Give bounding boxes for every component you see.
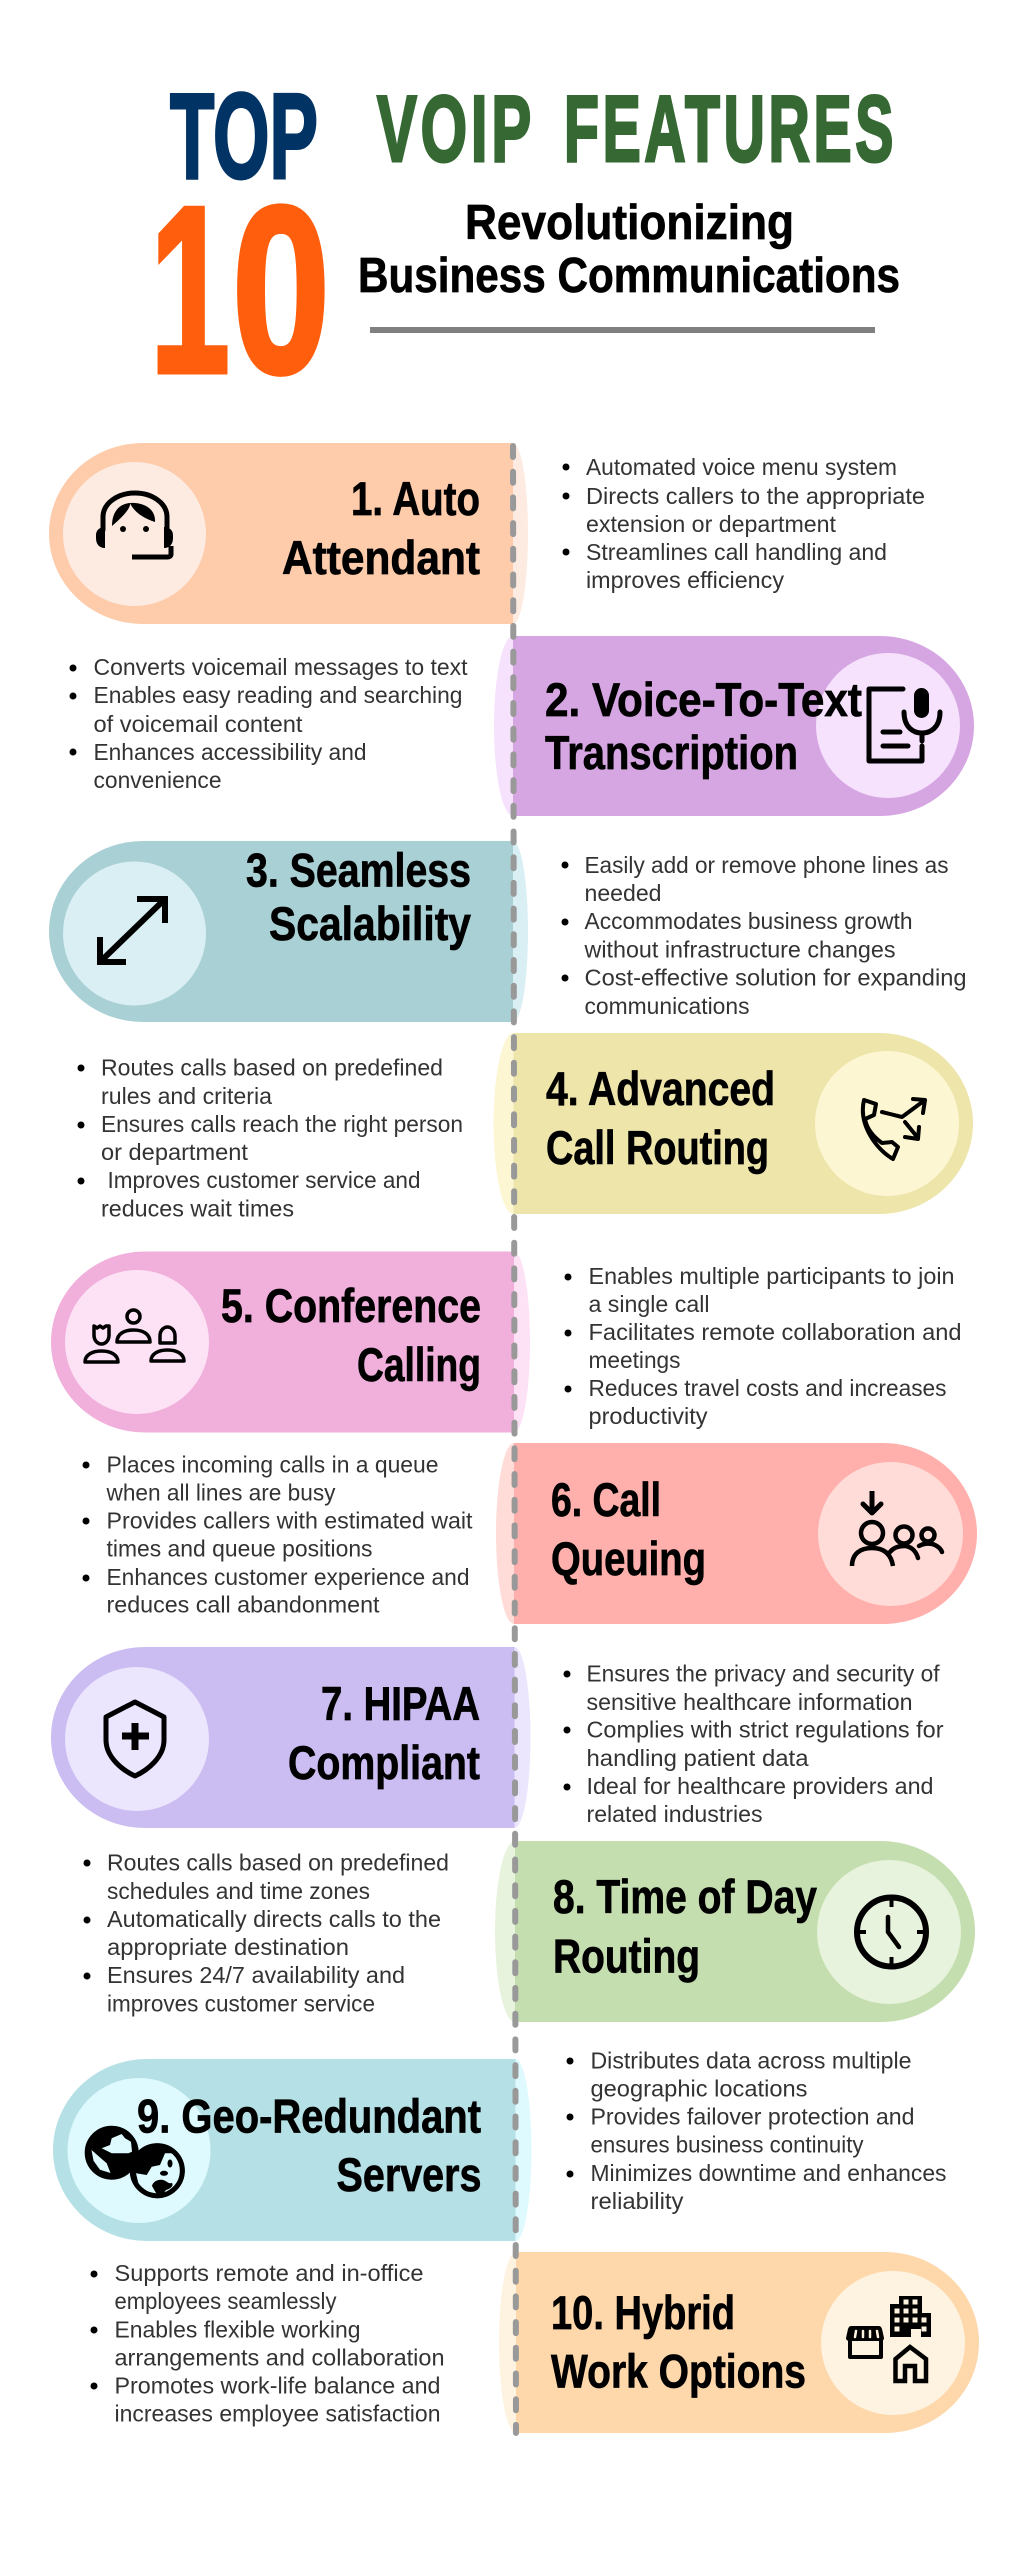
bullet list: without infrastructure changes bbox=[583, 936, 896, 962]
title: 10: 1 bbox=[150, 158, 230, 423]
heading bbox=[221, 1279, 481, 1391]
bullet list: sensitive healthcare information bbox=[586, 1689, 912, 1715]
heading: 5. Conference bbox=[221, 1279, 481, 1332]
bullet list: Routes calls based on predefined bbox=[107, 1850, 449, 1876]
bullet list: appropriate destination bbox=[107, 1934, 349, 1960]
bullet list: improves efficiency bbox=[586, 567, 785, 593]
bullet list: Easily add or remove phone lines as bbox=[584, 852, 948, 878]
bullet list: meetings bbox=[588, 1347, 680, 1373]
bullet list: reliability bbox=[590, 2188, 684, 2214]
heading: Routing bbox=[553, 1930, 700, 1982]
bullet list: employees seamlessly bbox=[114, 2288, 337, 2314]
bullet list: or department bbox=[101, 1139, 249, 1165]
bullet list: related industries bbox=[586, 1801, 762, 1827]
icon: headset agent bbox=[96, 493, 173, 557]
bullet list bbox=[70, 654, 468, 793]
bullet list: Enables flexible working bbox=[114, 2316, 360, 2342]
bullet list bbox=[78, 1054, 463, 1222]
heading: 1. Auto bbox=[351, 472, 480, 525]
bullet list: Cost-effective solution for expanding bbox=[584, 964, 966, 990]
title: TOP: TOP bbox=[170, 68, 318, 204]
subtitle line 2: Business Communications bbox=[358, 249, 900, 303]
bullet list: reduces call abandonment bbox=[106, 1592, 380, 1618]
bullet list: Enables multiple participants to join bbox=[588, 1263, 954, 1289]
bullet list: Provides callers with estimated wait bbox=[106, 1508, 473, 1534]
bullet list: handling patient data bbox=[586, 1745, 809, 1771]
panel: 7 HIPAA Compliant bbox=[51, 1647, 944, 1828]
heading bbox=[288, 1677, 480, 1789]
bullet list: Complies with strict regulations for bbox=[586, 1716, 944, 1742]
bullet list: Streamlines call handling and bbox=[586, 539, 887, 565]
icon: shield with plus bbox=[106, 1702, 164, 1776]
panel: 10 Hybrid Work Options bbox=[90, 2252, 979, 2433]
bullet list bbox=[562, 852, 966, 1019]
bullet list: Distributes data across multiple bbox=[590, 2048, 912, 2074]
bullet list: Ensures 24/7 availability and bbox=[107, 1962, 405, 1988]
heading: 8. Time of Day bbox=[553, 1870, 817, 1923]
panel: 8 Time of Day Routing bbox=[84, 1841, 975, 2022]
bullet list: Promotes work-life balance and bbox=[114, 2372, 440, 2398]
bullet list: communications bbox=[584, 993, 750, 1019]
title underline bbox=[370, 327, 875, 333]
title: 10 second digit: 0 bbox=[232, 158, 330, 423]
icon: document with microphone bbox=[869, 688, 940, 761]
bullet list: convenience bbox=[94, 767, 222, 793]
heading: Compliant bbox=[288, 1736, 480, 1789]
bullet list: Directs callers to the appropriate bbox=[586, 483, 925, 509]
bullet list: ensures business continuity bbox=[590, 2132, 864, 2158]
panel: 4 Advanced Call Routing bbox=[78, 1033, 973, 1222]
heading: Attendant bbox=[282, 531, 480, 584]
bullet list bbox=[564, 1263, 962, 1429]
panel: 1 Auto Attendant bbox=[49, 443, 925, 624]
bullet list bbox=[90, 2260, 444, 2426]
bullet list: Ensures calls reach the right person bbox=[101, 1111, 463, 1137]
bullet list: increases employee satisfaction bbox=[114, 2400, 440, 2426]
heading bbox=[553, 1870, 817, 1982]
heading bbox=[551, 1473, 706, 1585]
bullet list: Automated voice menu system bbox=[586, 454, 897, 480]
bullet list: Provides failover protection and bbox=[590, 2104, 914, 2130]
subtitle line 1: Revolutionizing bbox=[465, 196, 794, 250]
bullet list: a single call bbox=[588, 1291, 710, 1317]
heading: 7. HIPAA bbox=[321, 1677, 480, 1730]
heading bbox=[282, 472, 480, 584]
bullet list: Ideal for healthcare providers and bbox=[586, 1773, 934, 1799]
heading: Transcription bbox=[545, 726, 798, 779]
bullet list: Minimizes downtime and enhances bbox=[590, 2160, 946, 2186]
bullet list: Automatically directs calls to the bbox=[107, 1906, 441, 1932]
title: VOIP: VOIP bbox=[377, 76, 535, 181]
bullet list: Routes calls based on predefined bbox=[101, 1054, 443, 1080]
bullet list bbox=[564, 1660, 944, 1827]
bullet list: Ensures the privacy and security of bbox=[586, 1660, 940, 1686]
heading: Work Options bbox=[551, 2344, 806, 2398]
bullet list: reduces wait times bbox=[101, 1196, 294, 1222]
heading: 9. Geo-Redundant bbox=[137, 2090, 481, 2142]
bullet list bbox=[82, 1452, 473, 1618]
bullet list bbox=[566, 2048, 946, 2214]
bullet list bbox=[84, 1850, 449, 2016]
panel: 2 Voice-To-Text Transcription bbox=[70, 636, 974, 816]
bullet list: Enables easy reading and searching bbox=[94, 682, 462, 708]
bullet list: needed bbox=[584, 880, 662, 906]
bullet list: Converts voicemail messages to text bbox=[94, 654, 468, 680]
bullet list: of voicemail content bbox=[94, 711, 303, 737]
bullet list: Places incoming calls in a queue bbox=[106, 1452, 438, 1478]
bullet list: extension or department bbox=[586, 511, 837, 537]
bullet list: geographic locations bbox=[590, 2076, 808, 2102]
heading: 2. Voice-To-Text bbox=[545, 673, 862, 726]
heading bbox=[545, 673, 862, 779]
icon: two globes bbox=[85, 2126, 185, 2198]
bullet list: Improves customer service and bbox=[108, 1167, 420, 1193]
icon: people queue with arrow bbox=[852, 1491, 942, 1566]
bullet list: Enhances customer experience and bbox=[106, 1564, 470, 1590]
icon: office, store and home bbox=[846, 2296, 931, 2381]
icon: three people meeting bbox=[85, 1310, 184, 1362]
dashed center timeline bbox=[513, 446, 516, 2433]
icon: phone with routing arrows bbox=[863, 1099, 925, 1159]
bullet list: Supports remote and in-office bbox=[114, 2260, 424, 2286]
panel: 5 Conference Calling bbox=[51, 1252, 962, 1432]
heading: Servers bbox=[336, 2148, 482, 2201]
icon: diagonal double arrow bbox=[100, 899, 165, 962]
title bbox=[150, 68, 900, 423]
bullet list bbox=[562, 454, 925, 593]
heading: 4. Advanced bbox=[546, 1062, 775, 1115]
heading bbox=[137, 2090, 482, 2201]
heading: 6. Call bbox=[551, 1473, 661, 1526]
heading: 10. Hybrid bbox=[551, 2286, 735, 2339]
bullet list: rules and criteria bbox=[101, 1083, 272, 1109]
panel: 9 Geo-Redundant Servers bbox=[53, 2048, 946, 2241]
panel: 6 Call Queuing bbox=[82, 1443, 977, 1624]
heading bbox=[246, 844, 471, 950]
bullet list: schedules and time zones bbox=[107, 1878, 370, 1904]
bullet list: Facilitates remote collaboration and bbox=[588, 1319, 962, 1345]
bullet list: when all lines are busy bbox=[106, 1480, 336, 1506]
heading: 3. Seamless bbox=[246, 844, 471, 896]
panel: 3 Seamless Scalability bbox=[49, 841, 966, 1022]
bullet list: Enhances accessibility and bbox=[94, 739, 366, 765]
heading: Calling bbox=[357, 1338, 481, 1391]
heading: Call Routing bbox=[546, 1121, 769, 1174]
heading: Queuing bbox=[551, 1532, 706, 1585]
bullet list: productivity bbox=[588, 1403, 708, 1429]
icon: clock bbox=[857, 1897, 926, 1967]
bullet list: Accommodates business growth bbox=[584, 908, 912, 934]
heading bbox=[551, 2286, 806, 2398]
heading: Scalability bbox=[269, 897, 471, 950]
bullet list: Reduces travel costs and increases bbox=[588, 1375, 946, 1401]
heading bbox=[546, 1062, 775, 1174]
bullet list: improves customer service bbox=[107, 1990, 375, 2016]
bullet list: times and queue positions bbox=[106, 1536, 372, 1562]
bullet list: arrangements and collaboration bbox=[114, 2344, 444, 2370]
